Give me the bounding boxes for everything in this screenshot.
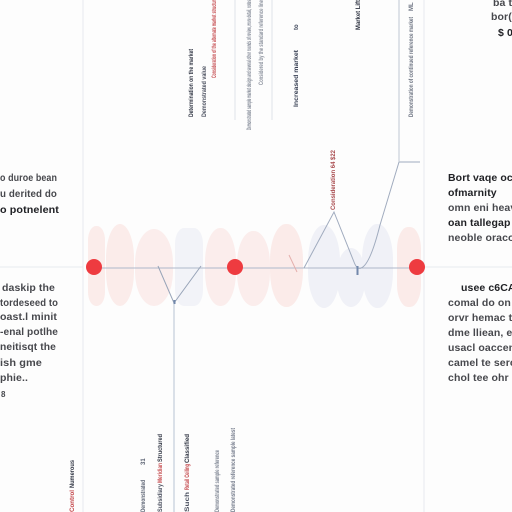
bottom label: short: Demonstrated <box>141 480 147 512</box>
right text: upper block: oan tallegap <box>448 217 510 229</box>
left text: lower block: 8 <box>1 390 6 399</box>
left text: upper block: o potnelent <box>0 204 59 216</box>
trend line: peak and rise <box>304 162 420 268</box>
top-right text fragment: bor( <box>491 11 512 23</box>
top label: dark 4: Market Lift <box>356 0 362 30</box>
top label: dark 3: Increased market <box>294 50 300 107</box>
marker: left <box>86 259 102 275</box>
connector: dip to lower label <box>173 303 175 512</box>
top label: dark 3 tail: to <box>294 24 300 30</box>
right text: lower block: chol tee ohr <box>448 372 509 384</box>
left text: upper block: u derited do <box>0 188 57 200</box>
marker: right <box>409 259 425 275</box>
right text: upper block <box>448 172 512 244</box>
right text: lower block: orvr hemac t <box>448 312 512 324</box>
right text: lower block <box>448 282 512 384</box>
background wave bands <box>88 224 421 308</box>
top-right text fragment <box>491 0 512 39</box>
bottom label: grey 1: Demonstrated sample reference <box>215 450 221 512</box>
peak label: Consideration 64 $22 <box>331 149 337 210</box>
top label: grey 3 tail: ML <box>409 2 415 11</box>
left text: lower block: -enal potlhe <box>0 326 58 338</box>
right text: upper block: Bort vaqe oc <box>448 172 512 184</box>
bottom label: mixed 1: Meridian <box>158 463 164 483</box>
connector: rise to upper label <box>398 0 400 162</box>
bottom label: mixed 2: Such <box>185 492 191 512</box>
bottom label: mixed 2 <box>185 434 191 512</box>
right text: upper block: ofmarnity <box>448 187 497 199</box>
left text: lower block: oast.l minit <box>0 311 57 323</box>
bottom label: mixed 2: Retail Ceiling <box>185 464 191 490</box>
left text: lower block <box>0 282 58 399</box>
bottom label: red and dark <box>70 459 76 512</box>
bottom label: short: 31 <box>141 458 147 465</box>
bottom label: red and dark: Control <box>70 490 76 512</box>
left text: upper block: o duroe bean <box>0 172 57 184</box>
bottom label: mixed 1 <box>158 434 164 512</box>
top label: dark 2: Demonstrated value <box>202 65 208 117</box>
bottom label: grey 2: Demonstrated reference sample latest <box>231 428 237 512</box>
bottom label: red and dark: Numerous <box>70 459 76 488</box>
bottom label: mixed 2: Classified <box>185 434 191 463</box>
left text: lower block: phie.. <box>0 372 28 384</box>
tick marks <box>174 266 358 304</box>
tick: red mark <box>289 255 297 272</box>
left text: lower block: tordeseed to <box>0 297 58 309</box>
left text: lower block: neitisqt the <box>0 341 56 353</box>
bottom label: mixed 1: Subsidiary <box>158 483 164 512</box>
bottom label: mixed 1: Structured <box>158 434 164 462</box>
left text: upper block <box>0 172 59 216</box>
left text: lower block: daskip the <box>2 282 55 294</box>
left text: lower block: ish gme <box>0 357 42 369</box>
top label: dark 1: Determination on the market <box>189 49 195 117</box>
timeline axis <box>94 267 417 269</box>
trend line: dip <box>158 266 201 303</box>
marker: centre <box>227 259 243 275</box>
